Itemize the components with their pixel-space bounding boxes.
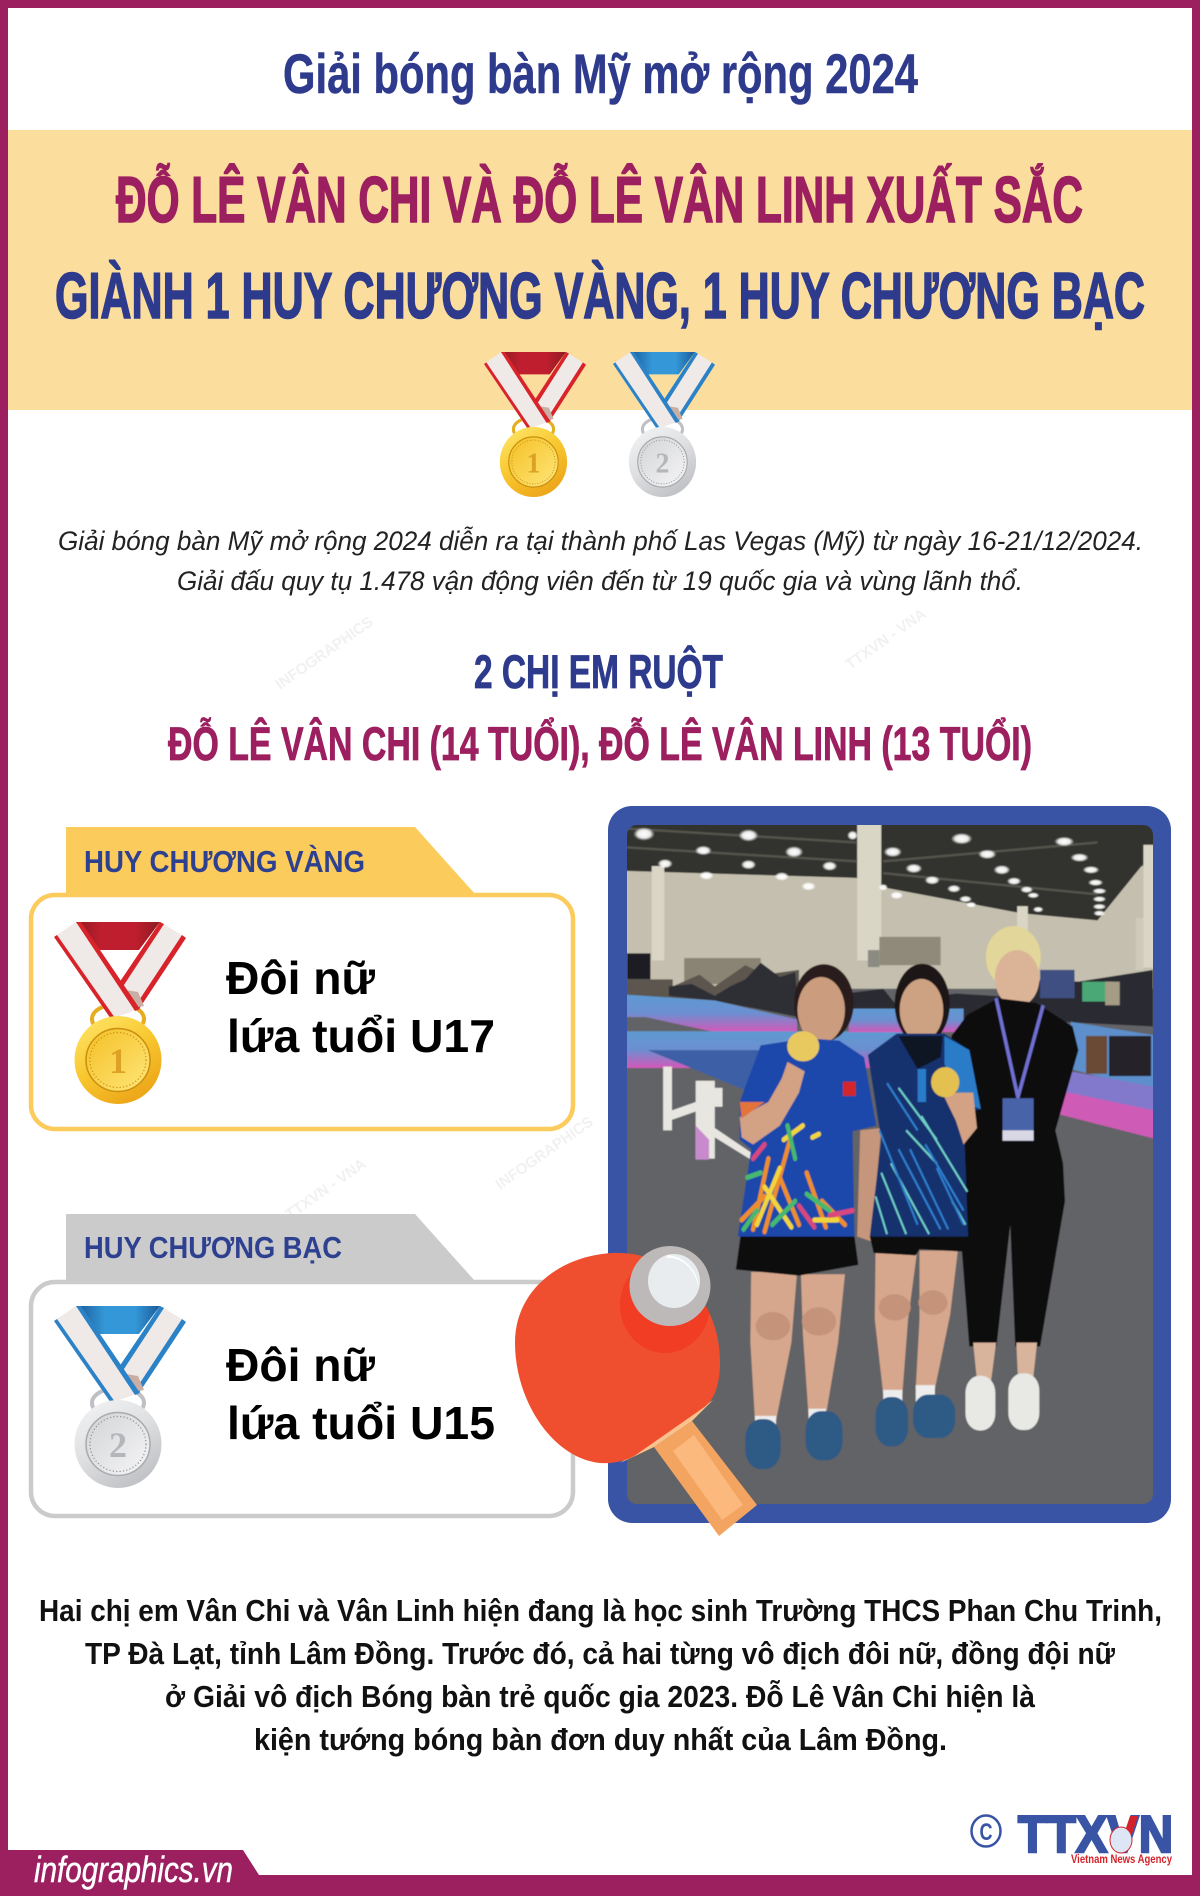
panel: headline band	[8, 130, 1192, 410]
ball	[630, 1246, 710, 1326]
gold category text: lứa tuổi U17	[227, 1010, 495, 1062]
watermarks: INFOGRAPHICS	[273, 613, 377, 693]
watermarks: TTXVN - VNA	[283, 1155, 370, 1223]
intro text: Giải bóng bàn Mỹ mở rộng 2024 diễn ra tại thành phố Las Vegas (Mỹ) từ ngày 16-21/12/2024.	[58, 525, 1143, 556]
watermarks: TTXVN - VNA	[843, 605, 930, 673]
silver card	[31, 1282, 573, 1516]
ball shadow	[620, 1273, 710, 1353]
body paragraph	[39, 1593, 1162, 1757]
body paragraph: kiện tướng bóng bàn đơn duy nhất của Lâm Đồng.	[254, 1722, 947, 1757]
silver tab	[66, 1214, 475, 1281]
paddle handle root	[620, 1400, 713, 1463]
intro text: Giải đấu quy tụ 1.478 vận động viên đến từ 19 quốc gia và vùng lãnh thổ.	[177, 566, 1023, 596]
gold tab	[66, 827, 475, 894]
photo: athletes in the hall	[623, 819, 1159, 1513]
watermarks	[273, 605, 930, 1223]
table	[648, 1050, 760, 1090]
body paragraph: TP Đà Lạt, tỉnh Lâm Đồng. Trước đó, cả hai từng vô địch đôi nữ, đồng đội nữ	[85, 1636, 1115, 1671]
panel: gold medal	[31, 827, 573, 1129]
body paragraph: ở Giải vô địch Bóng bàn trẻ quốc gia 2023. Đỗ Lê Vân Chi hiện là	[165, 1679, 1036, 1714]
icon: gold medal	[54, 922, 186, 1104]
section heading	[168, 645, 1032, 770]
silver tab label: HUY CHƯƠNG BẠC	[84, 1230, 342, 1265]
crowd	[627, 953, 651, 979]
icon: silver medal	[54, 1306, 186, 1488]
barriers	[623, 994, 797, 1032]
title: Giải bóng bàn Mỹ mở rộng 2024	[283, 42, 918, 105]
logo: TTXVN: C	[980, 1819, 992, 1846]
footer site name: infographics.vn	[34, 1849, 233, 1890]
coach	[951, 926, 1078, 1430]
copyright mark	[972, 1816, 1000, 1846]
silver category text	[226, 1339, 495, 1449]
silver category text: lứa tuổi U15	[227, 1397, 495, 1449]
left athlete	[736, 964, 881, 1469]
intro text	[58, 525, 1143, 596]
gold category text	[226, 952, 495, 1062]
gold category text: Đôi nữ	[226, 952, 376, 1004]
silver category text: Đôi nữ	[226, 1339, 376, 1391]
icon: silver medal top	[613, 352, 715, 497]
logo: TTXVN	[972, 1806, 1173, 1866]
middle athlete	[868, 964, 981, 1447]
icon: gold medal top	[484, 352, 586, 497]
agency tagline: Vietnam News Agency	[1071, 1854, 1172, 1866]
paddle blade	[515, 1253, 720, 1463]
watermarks: INFOGRAPHICS	[493, 1113, 597, 1193]
gold card	[31, 895, 573, 1129]
paddle handle	[654, 1421, 757, 1536]
section heading: 2 CHỊ EM RUỘT	[474, 645, 723, 698]
gold tab label: HUY CHƯƠNG VÀNG	[84, 844, 365, 879]
TTXVN wordmark: TTXVN	[1018, 1806, 1173, 1864]
panel: silver medal	[31, 1214, 573, 1516]
photo frame	[608, 806, 1171, 1523]
icon: table tennis paddle and ball	[515, 1246, 757, 1536]
watermarks: INFOGRAPHICS	[313, 933, 417, 1013]
